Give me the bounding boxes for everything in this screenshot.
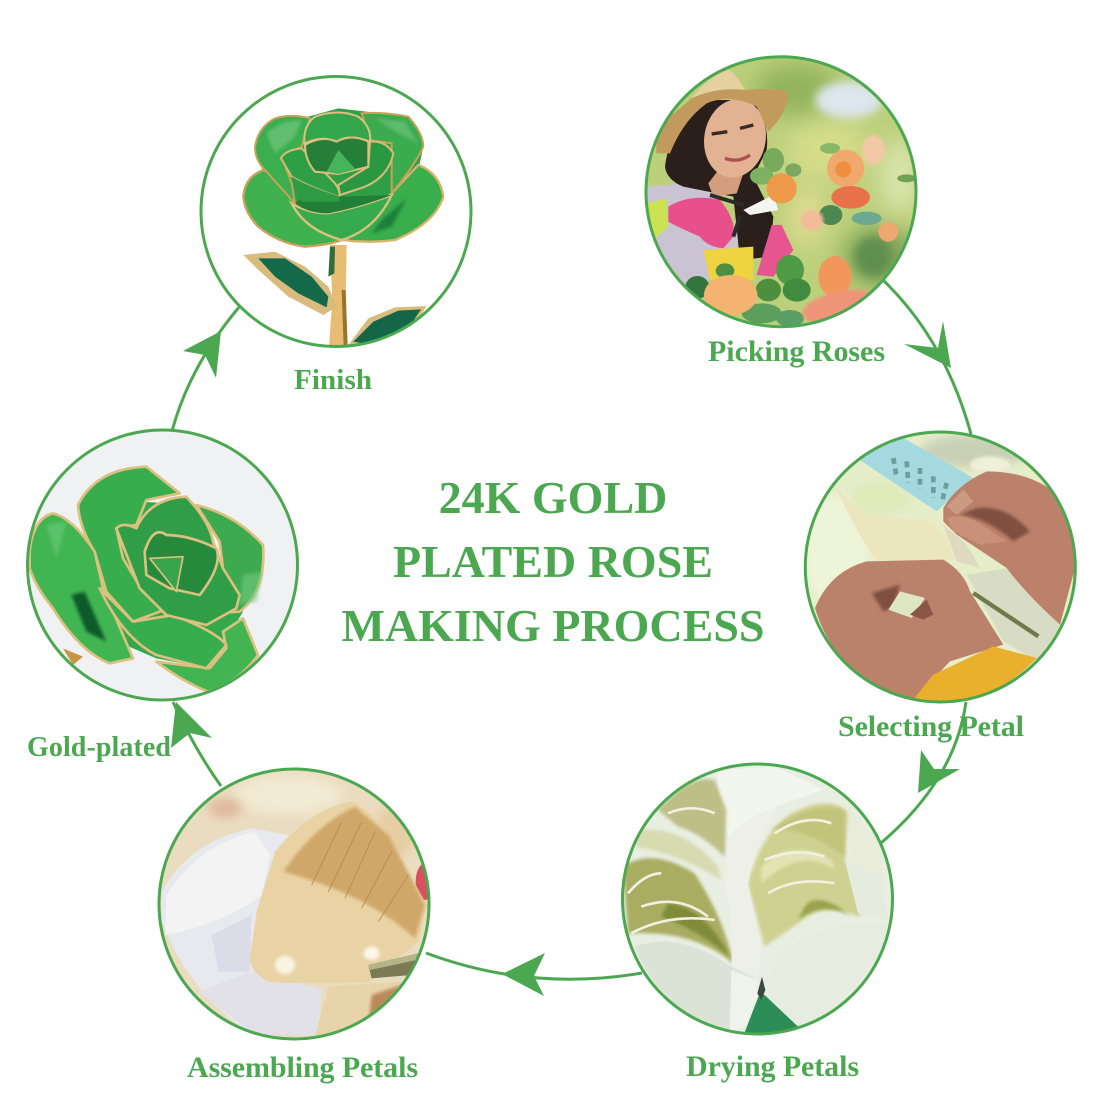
scissors xyxy=(743,195,778,215)
rose base fill xyxy=(262,108,423,202)
lime sleeve xyxy=(647,198,668,238)
step: drying petals photo xyxy=(618,760,898,1040)
label: gold-plated: Gold-plated xyxy=(27,732,171,763)
outer petals xyxy=(243,170,342,247)
pink gloves xyxy=(668,198,734,248)
green-tinted petal stacks xyxy=(658,779,726,857)
title: 24K GOLD xyxy=(439,472,667,523)
petals xyxy=(30,467,263,692)
white divider petal xyxy=(727,837,757,966)
netted petal xyxy=(835,485,955,563)
right leaf xyxy=(348,306,427,348)
rose stem xyxy=(329,245,348,347)
label: picking roses: Picking Roses xyxy=(708,335,885,368)
below petal xyxy=(315,982,402,1037)
title: MAKING PROCESS xyxy=(342,600,764,651)
title: PLATED ROSE xyxy=(393,536,713,587)
petal shadow xyxy=(71,592,106,642)
label: selecting petal: Selecting Petal xyxy=(838,710,1024,743)
arrow: assembling petals to gold-plated xyxy=(171,702,221,786)
label: finish: Finish xyxy=(294,364,372,396)
petal edge highlights xyxy=(628,808,835,933)
arrow: picking roses to selecting petal xyxy=(884,281,971,434)
white petals at top xyxy=(718,767,825,837)
yellow sleeve xyxy=(913,646,1037,705)
middle petals xyxy=(281,148,339,197)
blurred garden background xyxy=(753,63,920,287)
step: selecting petal photo xyxy=(800,428,1080,708)
lower white petals xyxy=(635,941,758,1032)
rose centre xyxy=(304,112,370,147)
title xyxy=(342,472,764,651)
centre bowl xyxy=(292,195,392,240)
rose base fill xyxy=(95,502,243,668)
orange roses xyxy=(827,150,864,187)
yellow apron xyxy=(703,247,753,280)
red accent xyxy=(416,864,428,900)
green gap xyxy=(744,994,798,1032)
step: gold-plated photo xyxy=(23,425,303,705)
white glove xyxy=(162,828,322,1035)
label: assembling petals: Assembling Petals xyxy=(187,1051,418,1084)
face xyxy=(708,172,743,196)
arrow: selecting petal to drying petals xyxy=(881,702,966,843)
pale table and stem xyxy=(967,568,1063,661)
step: finish photo xyxy=(195,70,475,350)
step: picking roses photo xyxy=(640,50,920,330)
label: drying petals: Drying Petals xyxy=(686,1050,859,1083)
straw hat xyxy=(656,70,788,153)
leaves xyxy=(763,148,784,172)
arrow: gold-plated to finish xyxy=(172,306,240,431)
hair xyxy=(665,100,773,260)
left hand xyxy=(815,560,1003,700)
right hand xyxy=(943,471,1075,625)
tool xyxy=(368,953,418,978)
woman's body xyxy=(647,183,740,283)
left leaf xyxy=(243,252,337,315)
step: assembling petals photo xyxy=(155,765,435,1045)
petal xyxy=(250,802,427,983)
plastic basket xyxy=(857,438,973,511)
arrow: drying petals to assembling petals xyxy=(426,953,642,996)
